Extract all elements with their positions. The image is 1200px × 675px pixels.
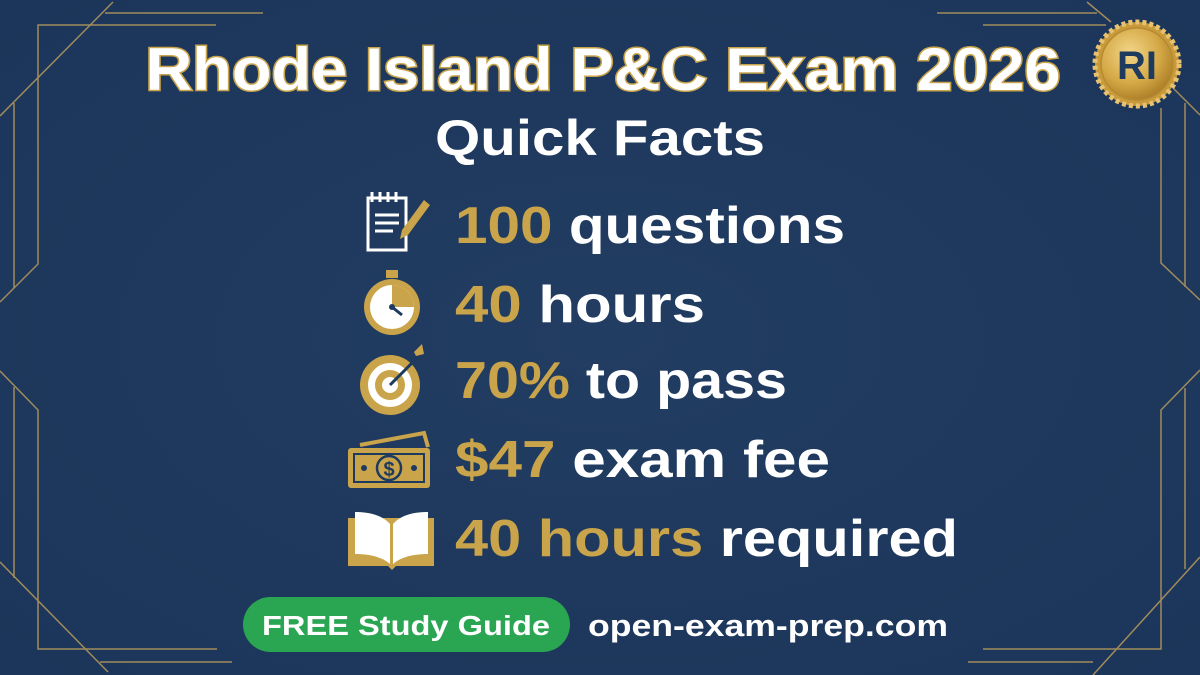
fact: fee: $47 exam fee (455, 431, 830, 489)
icon: stopwatch (364, 270, 420, 335)
subtitle: Quick Facts (435, 110, 765, 166)
button: FREE Study Guide: FREE Study Guide (262, 610, 550, 641)
title: Rhode Island P&C Exam 2026 (146, 36, 1060, 103)
fact: questions: 100 questions (455, 197, 845, 255)
icon: notepad and pencil (368, 192, 430, 250)
icon: money: $ (383, 459, 395, 481)
icon: open book (348, 512, 434, 570)
fact: pass: 70% to pass (455, 352, 787, 410)
fact: required: 40 hours required (455, 510, 958, 568)
icon: target (360, 344, 424, 415)
icon: money (348, 433, 430, 488)
fact: hours: 40 hours (455, 276, 705, 334)
badge: RI seal: RI (1117, 44, 1157, 88)
website url: open-exam-prep.com (588, 608, 948, 643)
badge: RI seal (1095, 22, 1179, 106)
button: FREE Study Guide (243, 597, 570, 652)
